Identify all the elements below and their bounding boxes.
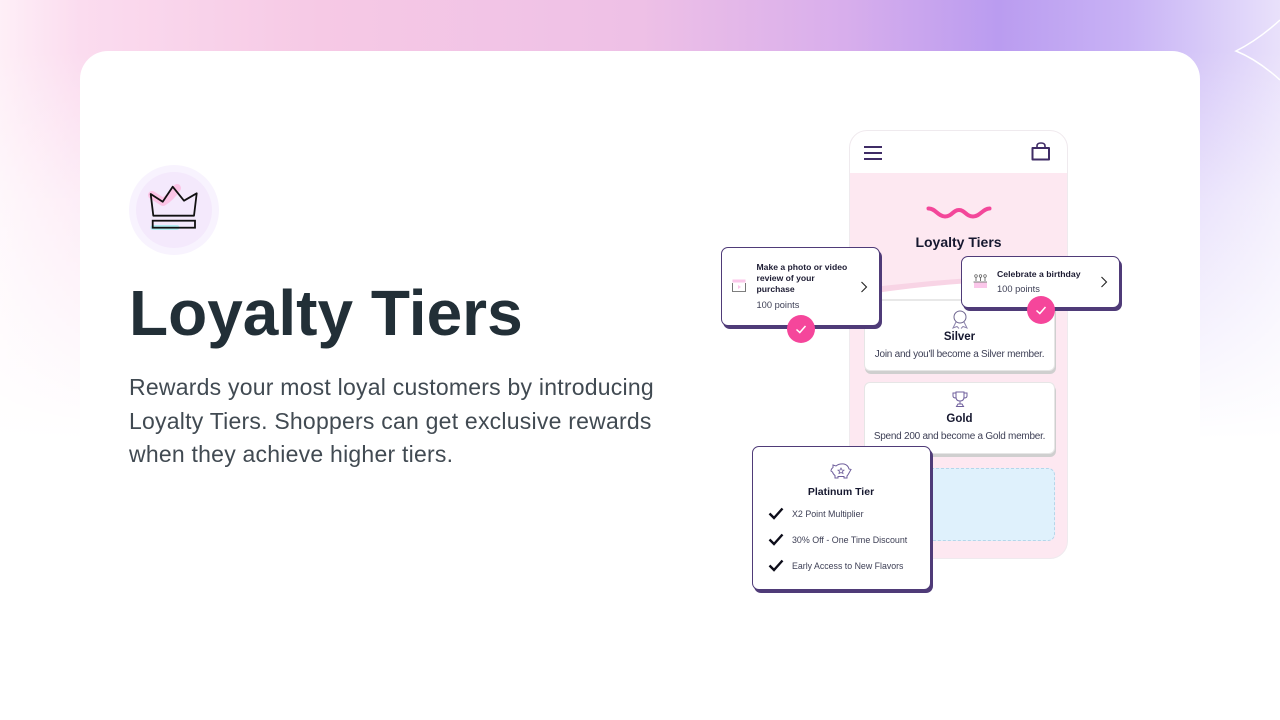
icon: video <box>732 280 746 292</box>
callout: birthday <box>961 256 1120 308</box>
platinum placeholder panel <box>864 468 1055 541</box>
silver text: Join and you'll become a Silver member. <box>875 348 1044 360</box>
benefit: discount <box>768 534 908 546</box>
description text: Loyalty Tiers. Shoppers can get exclusive rewards <box>129 408 652 434</box>
points: 100 points <box>997 284 1040 294</box>
icon: trophy <box>952 392 968 407</box>
tier card: silver <box>864 300 1055 371</box>
benefit: discount: 30% Off - One Time Discount <box>792 535 907 545</box>
text: purchase <box>756 284 795 294</box>
curved band <box>882 279 961 300</box>
silver heading: Silver <box>944 331 975 343</box>
gold heading: Gold <box>946 413 973 425</box>
description text: when they achieve higher tiers. <box>129 441 453 467</box>
icon: piggy bank <box>830 463 852 478</box>
points: 100 points <box>756 300 799 310</box>
description text <box>129 374 654 467</box>
tier card: gold <box>864 382 1055 454</box>
callout: photo review <box>721 247 880 326</box>
benefit: early access <box>768 560 904 572</box>
benefit: multiplier: X2 Point Multiplier <box>792 509 864 519</box>
icon: shopping bag <box>1032 142 1050 160</box>
gold text: Spend 200 and become a Gold member. <box>874 430 1045 442</box>
text: review of your <box>756 273 815 283</box>
phone header <box>850 131 1068 173</box>
benefit: early access: Early Access to New Flavors <box>792 561 903 571</box>
icon: chevron <box>1101 276 1108 288</box>
callout: platinum tier <box>752 446 931 590</box>
badge: pink check left <box>787 315 815 343</box>
phone mockup <box>849 130 1068 559</box>
text <box>756 262 847 294</box>
text: Make a photo or video <box>756 262 847 272</box>
text: Celebrate a birthday <box>997 269 1081 279</box>
benefit: multiplier <box>768 508 864 520</box>
phone heading: Loyalty Tiers <box>915 234 1002 250</box>
icon: rosette <box>952 310 968 329</box>
icon: chevron <box>861 282 868 292</box>
title: Loyalty Tiers <box>129 277 523 349</box>
badge: pink check right <box>1027 296 1055 324</box>
platinum heading: Platinum Tier <box>808 486 874 498</box>
icon: crown badge <box>129 165 219 255</box>
description text: Rewards your most loyal customers by introducing <box>129 374 654 400</box>
icon: pink wave <box>926 206 992 218</box>
icon: cake <box>974 274 987 288</box>
icon: menu <box>864 146 882 160</box>
